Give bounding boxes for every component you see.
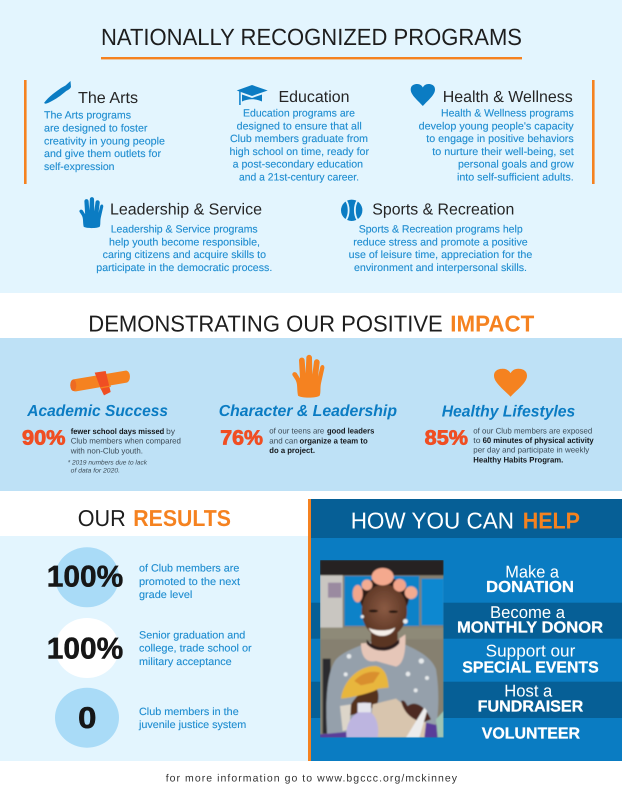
program: sports and recreation xyxy=(341,200,532,274)
stat: 76%: 76% xyxy=(220,426,263,449)
text: physical activity: per day and participate in weekly xyxy=(473,446,589,455)
text: sports and recreation description xyxy=(349,224,532,274)
action: support our special events xyxy=(462,642,599,676)
result: juvenile justice xyxy=(55,688,247,748)
heading: demonstrating our positive impact: DEMONSTRATING OUR POSITIVE xyxy=(88,311,443,337)
action: support our special events: SPECIAL EVENTS xyxy=(462,659,599,676)
text: physical activity: 60 minutes of physical activity xyxy=(483,436,594,445)
panel: impact xyxy=(0,338,622,491)
text: physical activity: Healthy Habits Program. xyxy=(473,456,563,464)
heading: the arts: The Arts xyxy=(78,90,138,107)
text: health and wellness description: to nurture their well-being, set xyxy=(432,146,574,158)
heading: leadership and service: Leadership & Service xyxy=(110,202,262,219)
icon: hand xyxy=(79,197,103,228)
text: physical activity: to xyxy=(473,436,481,445)
text: the arts description: self-expression xyxy=(44,161,115,173)
title underline xyxy=(101,57,522,59)
result: graduation: Senior graduation and xyxy=(139,629,245,641)
text: sports and recreation description: reduce stress and promote a positive xyxy=(353,236,528,248)
heading: how you can help: HOW YOU CAN xyxy=(351,507,514,533)
text: leadership and service description: participate in the democratic process. xyxy=(96,262,272,274)
footnote xyxy=(68,460,148,475)
text: leadership and service description: caring citizens and acquire skills to xyxy=(103,249,266,261)
text: sports and recreation description: Sports & Recreation programs help xyxy=(359,224,523,236)
panel: our results xyxy=(0,505,308,761)
result: promoted xyxy=(47,547,240,607)
heading: education: Education xyxy=(278,89,350,106)
column: character and leadership xyxy=(219,355,397,455)
text: health and wellness description xyxy=(419,108,574,184)
text: the arts description: are designed to foster xyxy=(44,122,148,134)
text: good leaders: do a project. xyxy=(269,446,315,455)
text: health and wellness description: into self-sufficient adults. xyxy=(457,172,574,184)
footnote: * 2019 numbers due to lack xyxy=(68,460,148,467)
action: make a donation xyxy=(486,562,574,596)
panel: nationally recognized programs xyxy=(0,0,622,293)
heading: how you can help: HELP xyxy=(523,507,580,533)
text: health and wellness description: Health & Wellness programs xyxy=(441,108,574,120)
text: leadership and service description xyxy=(96,224,272,274)
action: host a fundraiser xyxy=(478,682,584,716)
text: education description: and a 21st-century career. xyxy=(239,172,359,184)
text: education description: Education programs are xyxy=(243,108,355,120)
text: education description: high school on time, ready for xyxy=(230,146,370,158)
text: health and wellness description: to engage in positive behaviors xyxy=(426,133,574,145)
heading: our results xyxy=(78,505,231,531)
icon: paintbrush xyxy=(44,81,71,104)
result: graduation xyxy=(47,618,252,678)
result: promoted: of Club members are xyxy=(139,563,239,575)
program: leadership and service xyxy=(79,197,272,274)
result: graduation: college, trade school or xyxy=(139,642,252,654)
heading: health and wellness: Health & Wellness xyxy=(443,89,573,106)
program: education xyxy=(230,85,370,184)
text: fewer school days: Club members when compared xyxy=(71,437,181,446)
text: education description: a post-secondary education xyxy=(233,159,363,171)
text: the arts description: creativity in young people xyxy=(44,135,165,147)
icon: orange hand xyxy=(292,355,324,398)
text: good leaders: and can xyxy=(269,436,298,445)
photo: smiling girl with flower crown holding a taco xyxy=(320,560,444,738)
text: education description: Club members graduate from xyxy=(230,133,368,145)
action: become a monthly donor xyxy=(457,603,603,636)
text: fewer school days: fewer school days missed xyxy=(71,427,164,436)
icon: graduation cap xyxy=(237,85,268,105)
title: NATIONALLY RECOGNIZED PROGRAMS xyxy=(101,24,522,50)
program: the arts xyxy=(44,81,165,173)
icon: ball xyxy=(341,200,362,221)
program: health and wellness xyxy=(411,84,574,184)
action: support our special events: Support our xyxy=(486,642,576,661)
result: graduation: military acceptance xyxy=(139,656,232,668)
text: physical activity: of our Club members are exposed xyxy=(473,426,592,435)
heading: our results: OUR xyxy=(78,505,126,531)
action: volunteer: VOLUNTEER xyxy=(482,726,580,743)
text: health and wellness description: develop young people's capacity xyxy=(419,120,574,132)
result: promoted: promoted to the next xyxy=(139,576,240,588)
footnote: of data for 2020. xyxy=(71,468,120,475)
text: health and wellness description: personal goals and grow xyxy=(458,159,574,171)
text: good leaders: organize a team to xyxy=(300,436,368,445)
action: host a fundraiser: FUNDRAISER xyxy=(478,699,584,716)
heading: academic success: Academic Success xyxy=(26,403,168,420)
text: fewer school days: with non-Club youth. xyxy=(70,446,143,455)
stat: 85%: 85% xyxy=(425,426,468,449)
result: promoted: grade level xyxy=(139,589,192,601)
action: make a donation: DONATION xyxy=(486,579,574,596)
result: juvenile justice: juvenile justice system xyxy=(138,719,247,731)
column: academic success xyxy=(22,371,181,475)
text: leadership and service description: Leadership & Service programs xyxy=(111,224,258,236)
text: good leaders: of our teens are xyxy=(269,426,325,435)
left accent bar xyxy=(24,80,27,184)
action: host a fundraiser: Host a xyxy=(504,682,553,701)
stat: 90%: 90% xyxy=(22,426,66,449)
result: juvenile justice: 0 xyxy=(78,702,96,735)
column: healthy lifestyles xyxy=(425,369,594,464)
text: the arts description: The Arts programs xyxy=(44,110,131,122)
icon: diploma scroll xyxy=(70,371,130,395)
heading: sports and recreation: Sports & Recreation xyxy=(372,202,514,219)
text: fewer school days xyxy=(70,427,181,455)
heading: demonstrating our positive impact: IMPACT xyxy=(450,311,534,337)
text: education description: designed to ensure that all xyxy=(237,120,362,132)
text: good leaders: good leaders xyxy=(327,426,375,435)
text: education description xyxy=(230,108,370,184)
footer: more information: for more information go to www.bgccc.org/mckinney xyxy=(166,773,458,785)
text: sports and recreation description: use of leisure time, appreciation for the xyxy=(349,249,532,261)
text: leadership and service description: help youth become responsible, xyxy=(109,236,260,248)
action: make a donation: Make a xyxy=(505,562,560,581)
action: become a monthly donor: MONTHLY DONOR xyxy=(457,619,603,636)
text: good leaders xyxy=(269,426,375,455)
text: sports and recreation description: environment and interpersonal skills. xyxy=(354,262,527,274)
result: graduation: 100% xyxy=(47,632,123,665)
heading: our results: RESULTS xyxy=(133,505,231,531)
heading: healthy lifestyles: Healthy Lifestyles xyxy=(442,404,575,420)
text: physical activity xyxy=(473,426,594,464)
result: juvenile justice: Club members in the xyxy=(139,706,239,718)
text: fewer school days: by xyxy=(166,427,175,436)
text: the arts description: and give them outlets for xyxy=(44,148,162,160)
heading: character and leadership: Character & Leadership xyxy=(219,403,397,420)
result: promoted: 100% xyxy=(47,561,123,594)
icon: orange heart xyxy=(494,369,527,397)
text: the arts description xyxy=(44,110,165,173)
panel: how you can help xyxy=(308,499,622,761)
right accent bar xyxy=(592,80,595,184)
action: become a monthly donor: Become a xyxy=(490,603,566,622)
icon: heart xyxy=(411,84,435,106)
